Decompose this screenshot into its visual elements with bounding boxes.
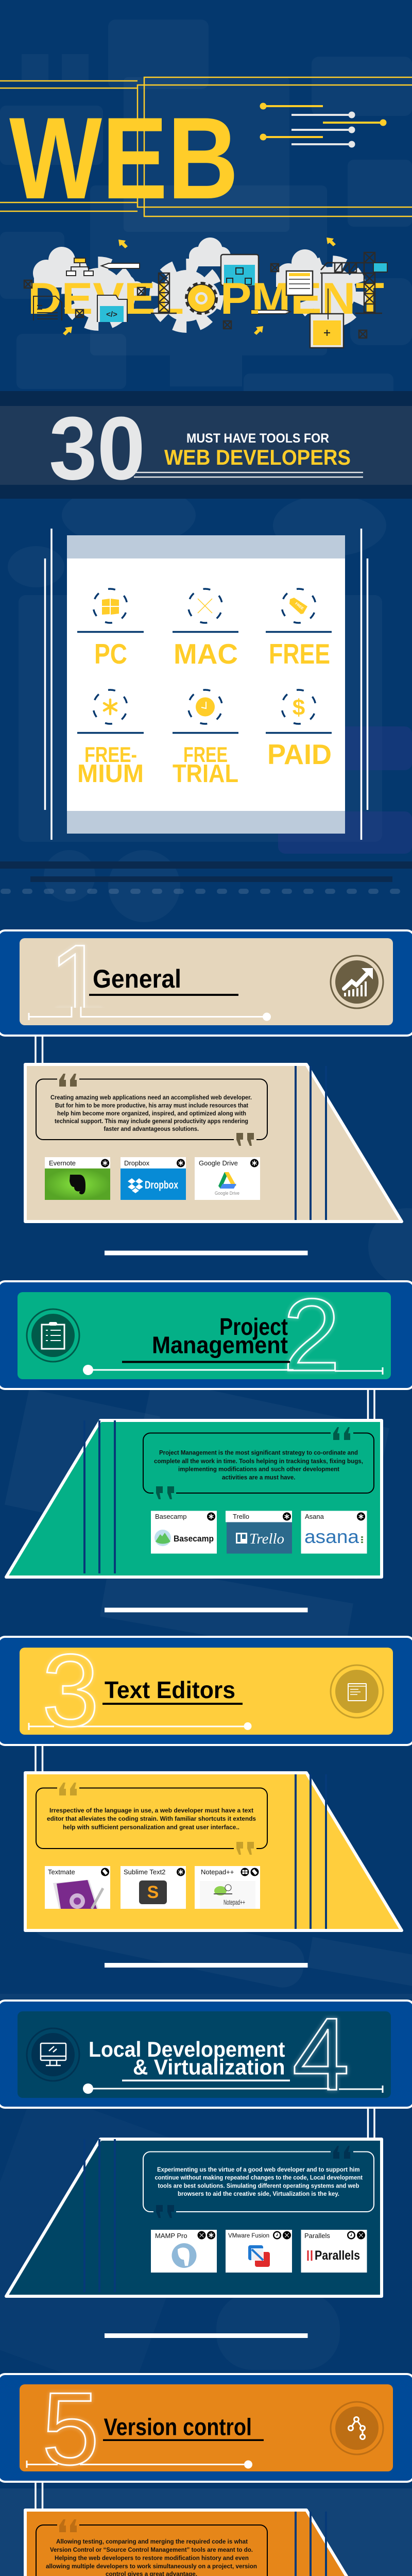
hero illustration: crane counterweight <box>373 263 387 272</box>
card: Asana: Asana <box>305 1513 324 1520</box>
icon: growth chart <box>331 956 383 1008</box>
connector 4 <box>368 2109 374 2138</box>
card: Notepad++: Notepad++ <box>224 1898 245 1906</box>
card: Asana <box>301 1511 367 1554</box>
legend panel <box>45 529 368 840</box>
card: Basecamp: Basecamp <box>174 1534 214 1544</box>
section 1 header: General <box>0 924 412 1039</box>
card: Sublime Text2: S <box>147 1883 159 1902</box>
legend: FREEMIUM: MIUM <box>77 760 144 788</box>
hero illustration: towers and crane <box>151 252 382 314</box>
section 2 header: Project Management <box>0 1278 412 1393</box>
quote text: Version Control or “Source Control Management” tools are meant to do. <box>50 2546 253 2553</box>
circuit line <box>28 1007 271 1021</box>
title: Text Editors <box>105 1676 235 1703</box>
closing quote mark <box>333 2146 350 2159</box>
section 1 panel <box>25 1064 402 1222</box>
quote text: editor that alleviates the coding strain. With familiar shortcuts it extends <box>47 1815 256 1822</box>
card: Basecamp: Basecamp <box>155 1513 186 1520</box>
legend: FREE TRIAL: TRIAL <box>173 760 238 788</box>
card: Dropbox <box>121 1157 186 1200</box>
title: WEB: WEB <box>9 93 238 223</box>
section 5 panel <box>25 2510 402 2576</box>
title: Version control <box>104 2413 252 2440</box>
legend: FREE: FREE <box>294 602 304 611</box>
opening quote mark <box>59 1783 77 1795</box>
card: Evernote <box>45 1157 110 1200</box>
card: Google Drive <box>195 1157 260 1200</box>
legend: PAID <box>266 688 332 770</box>
quote text: complete all the work in time. Tools helping in tracking tasks, fixing bugs, <box>154 1458 363 1465</box>
legend: FREEMIUM <box>77 688 144 788</box>
divider 3 <box>105 1963 308 1968</box>
hero illustration: yellow arrows <box>63 238 336 335</box>
card: Trello: Trello <box>233 1513 249 1520</box>
opening quote mark <box>156 1486 174 1499</box>
underline <box>102 1703 243 1705</box>
title: Local Developement <box>89 2037 285 2061</box>
quote text: technical support. This may include general productivity apps rendering <box>55 1117 248 1125</box>
legend: PAID: $ <box>293 695 305 720</box>
hero illustration: blue window <box>221 255 259 285</box>
circuit line <box>27 2461 252 2469</box>
hero illustration: yellow gear <box>183 280 220 317</box>
quote text: help with sufficient personalization and great user interface.. <box>63 1824 239 1831</box>
hero illustration: folder with code: </> <box>106 310 117 319</box>
quote text: help him become more organized, inspired, and optimized along with <box>57 1110 246 1117</box>
quote text: tools are best solutions. Simulating different operating systems and web <box>158 2182 359 2190</box>
big number 30: 30 <box>49 398 145 498</box>
card: VMware Fusion: VMware Fusion <box>228 2232 269 2239</box>
legend footer bars <box>0 861 412 891</box>
section 2 panel <box>6 1420 382 1577</box>
legend: PAID: PAID <box>267 738 332 770</box>
card: Sublime Text2 <box>121 1866 186 1909</box>
hero illustration: box with plus <box>310 289 344 348</box>
number 4: 4 <box>292 1997 350 2112</box>
quote text <box>154 1449 363 1481</box>
band: 30 tools heading <box>0 391 412 499</box>
legend: PC <box>77 587 144 670</box>
underline <box>122 2079 290 2081</box>
divider 1 <box>105 1251 308 1255</box>
subtitle: MUST HAVE TOOLS FOR <box>186 431 329 446</box>
hero speed lines <box>260 103 386 147</box>
legend: FREE <box>266 587 332 670</box>
section 3 header: Text Editors <box>0 1633 412 1748</box>
card: VMware Fusion <box>226 2230 292 2273</box>
underline <box>122 1361 290 1363</box>
card: MAMP Pro: MAMP Pro <box>155 2232 187 2240</box>
title line 2: Management <box>152 1331 288 1358</box>
closing quote mark <box>236 1842 254 1855</box>
legend: FREE TRIAL <box>173 688 238 788</box>
card: Google Drive: Google Drive <box>199 1159 238 1167</box>
quote text: activities are a must have. <box>222 1473 296 1481</box>
card: Trello: Trello <box>249 1531 284 1547</box>
connector 5 <box>36 2483 42 2509</box>
card: MAMP Pro <box>151 2230 217 2273</box>
closing quote mark <box>236 1133 254 1146</box>
icon: branch tree <box>331 2402 383 2454</box>
closing quote mark <box>333 1427 350 1440</box>
hero illustration: crossed boxes <box>24 264 367 338</box>
connector 3 <box>36 1746 42 1771</box>
quote text: allowing multiple developers to work simultaneously on a project, version <box>46 2563 257 2570</box>
double underline <box>134 472 363 477</box>
quote text <box>47 1807 256 1831</box>
quote text <box>50 1094 252 1132</box>
section 5 header: Version control <box>0 2371 412 2486</box>
circuit line <box>28 1722 251 1730</box>
title: Project <box>219 1313 288 1340</box>
hero illustration: document list <box>286 271 313 295</box>
circuit line <box>83 1365 383 1375</box>
card: Notepad++: Notepad++ <box>201 1868 234 1876</box>
title: General <box>93 964 181 993</box>
hero illustration: document file <box>33 296 62 320</box>
legend: MAC: MAC <box>174 638 238 670</box>
card: Basecamp <box>151 1511 217 1554</box>
quote box <box>143 1433 374 1493</box>
quote text <box>46 2538 257 2576</box>
divider 2 <box>105 1607 308 1613</box>
title line 2: & Virtualization <box>133 2055 285 2079</box>
legend: FREE: FREE <box>269 638 330 670</box>
card: Trello <box>226 1511 292 1554</box>
number 2: 2 <box>283 1278 340 1393</box>
card: Sublime Text2: Sublime Text2 <box>124 1868 165 1876</box>
hero illustration: network chart <box>66 258 93 276</box>
number 1: 1 <box>49 924 107 1039</box>
card: Parallels: Parallels <box>315 2248 360 2263</box>
hero illustration: pencils <box>101 263 290 314</box>
legend: FREE TRIAL: FREE <box>183 742 228 767</box>
legend: FREEMIUM: FREE- <box>84 742 137 767</box>
quote box <box>36 1788 267 1849</box>
connector 2 <box>368 1390 374 1419</box>
quote text: browsers to aid the creative side, Virtualization is the key. <box>178 2190 339 2197</box>
quote text: faster and advantageous solutions. <box>104 1125 199 1132</box>
title: DEVELOPMENT: DEVELOPMENT <box>28 274 384 324</box>
opening quote mark <box>59 1074 77 1087</box>
quote text <box>154 2166 363 2197</box>
quote box <box>143 2151 374 2212</box>
quote text: Project Management is the most significant strategy to co-ordinate and <box>159 1449 358 1456</box>
underline <box>103 2439 264 2441</box>
section 4 panel <box>6 2139 382 2296</box>
hero: yellow frame lines <box>0 77 412 216</box>
card: Dropbox: Dropbox <box>124 1159 150 1167</box>
icon: monitor <box>27 2028 79 2081</box>
icon: code window <box>331 1665 383 1718</box>
divider 4 <box>105 2333 308 2338</box>
card: Textmate <box>45 1866 110 1909</box>
quote text: implementing modifications and such other development <box>178 1465 339 1472</box>
quote text: But for him to be more productive, his array must include resources that <box>55 1101 248 1109</box>
circuit line <box>83 2083 383 2094</box>
quote text: Helping the web developers to restore modification history and even <box>55 2554 249 2562</box>
card: Evernote: Evernote <box>49 1159 76 1167</box>
opening quote mark <box>156 2205 174 2218</box>
subtitle highlight: WEB DEVELOPERS <box>164 445 351 469</box>
legend: PC: PC <box>94 638 127 670</box>
connector 1 <box>36 1037 42 1063</box>
quote text: Experimenting us the virtue of a good web developer and to support him <box>157 2166 359 2173</box>
number 3: 3 <box>42 1633 99 1748</box>
quote box <box>36 2525 267 2576</box>
card: Asana: asana <box>304 1526 359 1547</box>
card: Parallels: Parallels <box>304 2232 330 2240</box>
section 3 panel <box>25 1773 402 1930</box>
legend: MAC <box>173 587 238 670</box>
quote text: Creating amazing web applications need an accomplished web developer. <box>50 1094 252 1101</box>
card: Parallels <box>301 2230 367 2273</box>
icon: clipboard <box>27 1309 79 1362</box>
card: Google Drive: Google Drive <box>215 1191 239 1196</box>
card: Notepad++ <box>195 1866 260 1909</box>
quote text: Allowing testing, comparing and merging the required code is what <box>56 2538 248 2545</box>
opening quote mark <box>59 2519 77 2532</box>
hero illustration: folder with code <box>97 295 127 322</box>
number 5: 5 <box>42 2371 99 2486</box>
hero illustration: clouds and gears <box>33 238 361 327</box>
card: Textmate: Textmate <box>48 1868 75 1876</box>
quote text: Irrespective of the language in use, a web developer must have a text <box>49 1807 253 1814</box>
quote box <box>36 1079 267 1140</box>
card: Dropbox: Dropbox <box>145 1179 178 1191</box>
quote text: continue without making repeated changes to the code, Local development <box>154 2174 363 2181</box>
section 4 header: Local Development & Virtualization <box>0 1997 412 2112</box>
underline <box>89 994 238 996</box>
